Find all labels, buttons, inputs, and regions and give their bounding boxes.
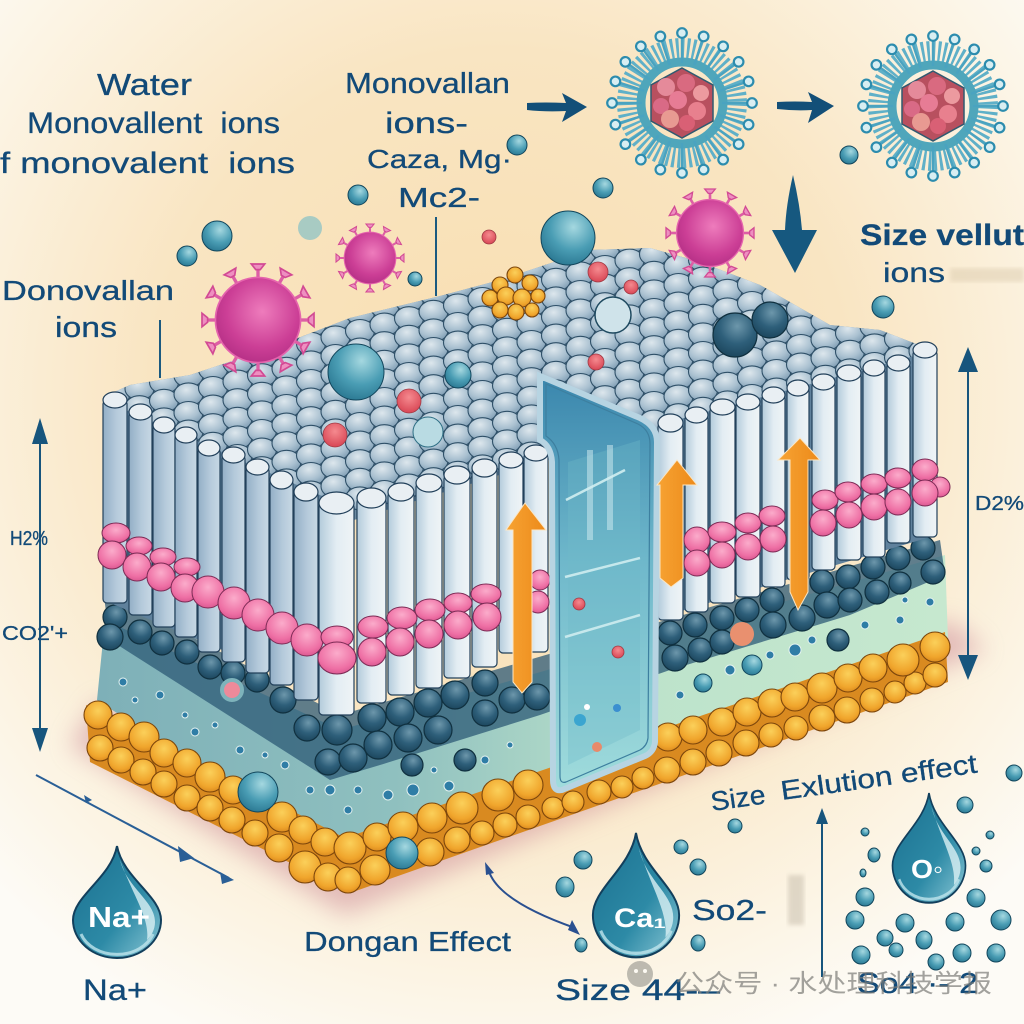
label: Size vellut: Size vellut [860, 219, 1024, 252]
label: So2-: So2- [692, 895, 767, 927]
arrow: large down [772, 175, 817, 273]
label: Monovallan: Monovallan [345, 68, 510, 100]
arrow: diagonal bottom left [36, 775, 234, 884]
label: Water: Water [97, 67, 192, 102]
label: Size 44: Size 44-– [555, 974, 720, 1007]
golden particle cluster [482, 267, 545, 320]
label: D2: D2% [975, 493, 1024, 515]
label: Mc2: Mc2- [398, 182, 480, 213]
label: CO2: CO2'+ [2, 623, 68, 645]
base shadow [70, 620, 985, 915]
drop: calcium: Ca₁ [614, 903, 666, 933]
label: Exlution effect: Exlution effect [779, 749, 979, 806]
orange arrow: left [506, 503, 546, 693]
embedded spheres over panel [222, 622, 849, 869]
label: ions right: ions [883, 257, 945, 288]
arrow: size exclusion vertical [816, 808, 828, 977]
arrow: left height dimension [32, 418, 48, 752]
orange arrow: centre [657, 460, 697, 587]
label: ions left: ions [55, 312, 117, 344]
panel: far-right column row [658, 342, 937, 620]
leader line: monovalent ions [159, 320, 161, 378]
floating bubbles and ions [177, 135, 894, 447]
arrow: first right [527, 93, 587, 122]
drop: calcium [593, 833, 679, 957]
dark navy sphere layer [97, 536, 945, 780]
icon: pink virus small [336, 224, 404, 292]
orange sphere layer [84, 632, 950, 893]
label: Na+: Na+ [83, 974, 147, 1007]
drop: sodium: Na+ [88, 902, 150, 934]
label: Ca Mg: Caza, Mg· [367, 144, 512, 174]
smudged glyph area [788, 875, 804, 925]
arrow: right height dimension [958, 347, 978, 680]
column gap shading [103, 350, 937, 705]
icon: pink virus large [202, 264, 314, 376]
arrow: curved to calcium drop [485, 862, 580, 935]
panel: front-right column row [319, 445, 548, 715]
label: of monovalent ions: f monovalent ions [0, 147, 295, 180]
label: Dongan Effect: Dongan Effect [304, 926, 511, 957]
drop: right oxygen: O◦ [911, 854, 943, 884]
pink sphere band [98, 459, 950, 674]
label: Size: Size [709, 780, 767, 817]
panel: teal and green substrate layer [97, 555, 948, 865]
watermark text: 公众号 · 水处理科技学报 [675, 970, 992, 998]
label: Donovallan: Donovallan [2, 275, 174, 306]
small ions around drops [556, 765, 1022, 970]
label: Monovallent ions: Monovallent ions [27, 107, 280, 140]
watermark icon [627, 961, 653, 987]
pore dots in substrate [119, 597, 934, 814]
arrow: second right [777, 92, 834, 123]
panel: top surface of packed spheres [103, 248, 916, 520]
drop: right oxygen [892, 793, 966, 903]
drop: sodium [73, 846, 161, 958]
label: ions dash: ions- [385, 107, 468, 140]
panel: glass water channel [540, 376, 657, 790]
label: H2: H2% [10, 528, 48, 550]
icon: pink virus right [666, 189, 754, 277]
smudged faint text [950, 268, 1024, 282]
leader line: Mc2 [435, 217, 437, 296]
icon: blue virus centre [607, 28, 757, 178]
label: So4 - 2: So4 ·- 2 [857, 968, 978, 1000]
icon: blue virus right [858, 31, 1008, 181]
panel: front-left column row [103, 392, 318, 700]
orange arrow: right [778, 438, 820, 610]
